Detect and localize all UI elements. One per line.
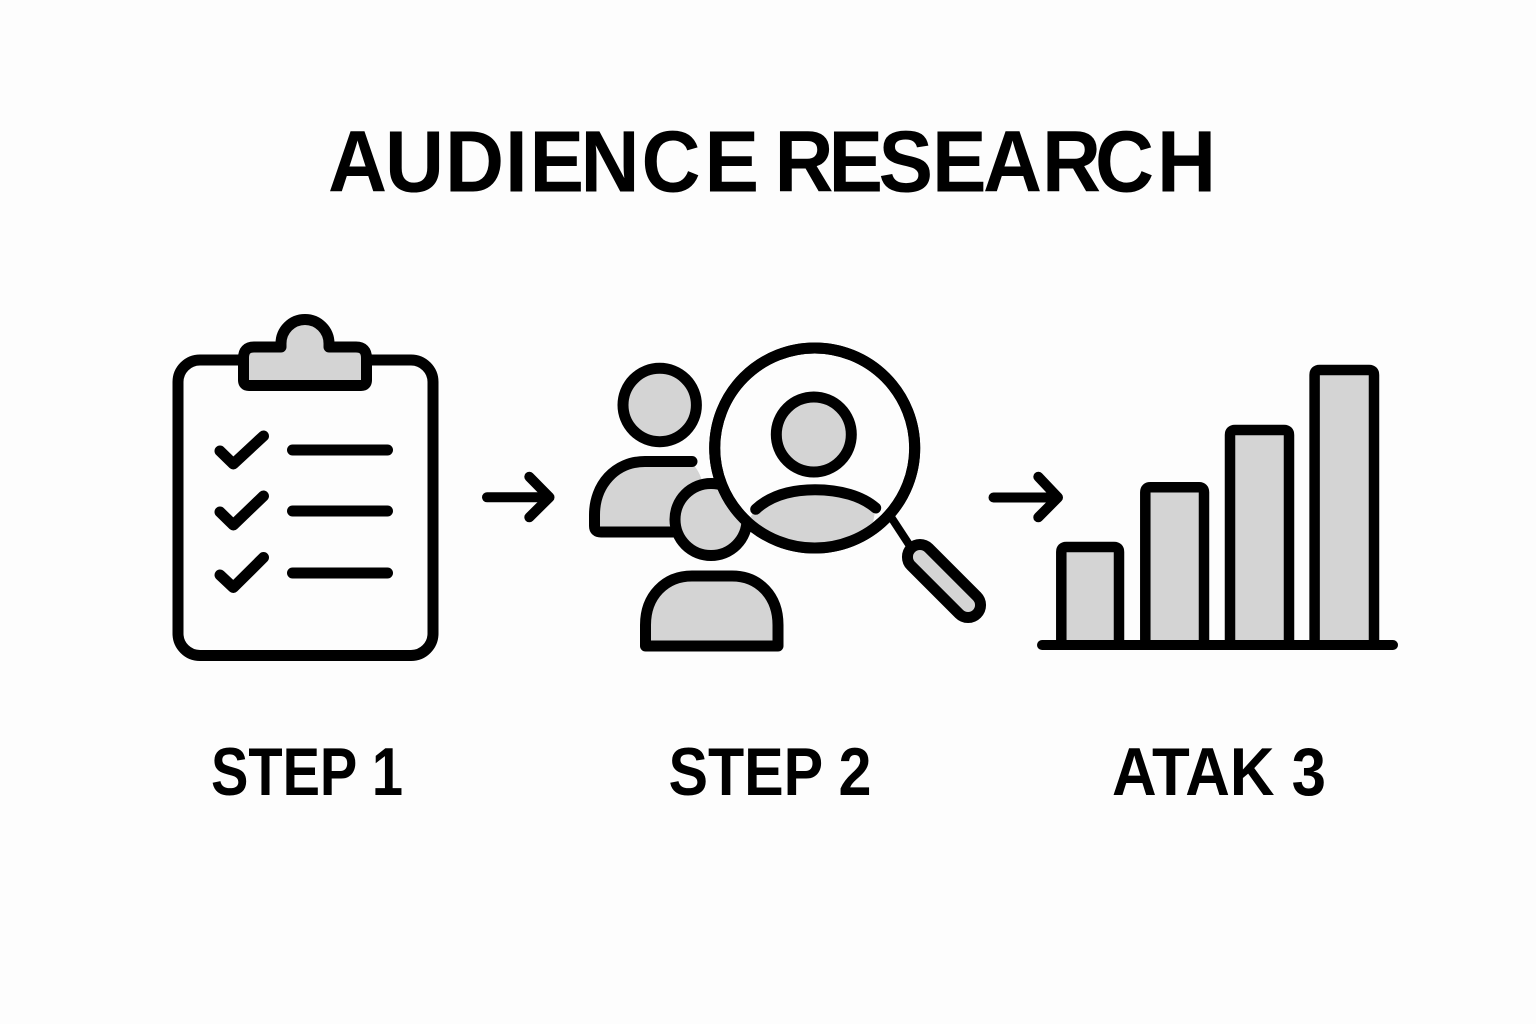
label: step 1: STEP 1 <box>211 734 403 810</box>
clipboard clamp <box>244 320 366 386</box>
arrow: step 2 to step 3 <box>994 477 1058 517</box>
clipboard board <box>178 360 433 656</box>
list line 1 <box>292 444 388 456</box>
arrow: step 1 to step 2 <box>487 477 550 517</box>
baseline <box>1042 640 1393 650</box>
icon: clipboard checklist <box>178 320 433 656</box>
bar 2 <box>1145 487 1204 645</box>
checkmark 2 <box>220 496 264 525</box>
bar 4 <box>1315 370 1374 645</box>
icon: audience with magnifying glass <box>594 348 986 646</box>
list line 2 <box>292 506 388 516</box>
person: back left <box>594 368 703 532</box>
bar chart icon <box>1042 370 1393 645</box>
label: atak 3: ATAK 3 <box>1112 734 1326 810</box>
title: AUDIENCE RESEARCH <box>328 113 1216 210</box>
checkmark 3 <box>220 558 264 588</box>
label: step 2: STEP 2 <box>668 734 872 810</box>
checkmark 1 <box>220 436 264 464</box>
list line 3 <box>292 568 388 578</box>
magnifying glass <box>715 348 986 623</box>
bar 1 <box>1061 547 1119 645</box>
person: front <box>646 484 778 646</box>
bar 3 <box>1230 430 1289 645</box>
